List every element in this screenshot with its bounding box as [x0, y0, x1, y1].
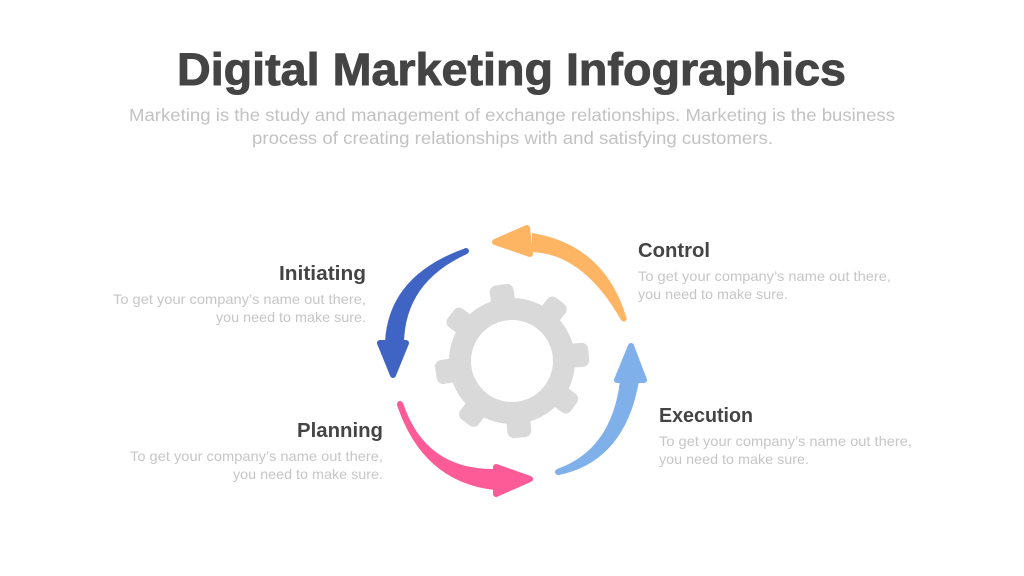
subtitle [129, 105, 895, 148]
text block: planning: you need to make sure. [233, 466, 383, 482]
title: Digital Marketing Infographics [177, 44, 846, 95]
text block: initiating: To get your company’s name out there, [113, 291, 366, 307]
icon: gear [434, 283, 590, 439]
text block: initiating: you need to make sure. [216, 309, 366, 325]
text block: execution: you need to make sure. [659, 451, 809, 467]
text block: planning: Planning [297, 420, 383, 442]
text block: execution [659, 405, 912, 467]
text block: planning: To get your company’s name out there, [130, 448, 383, 464]
text block: initiating: Initiating [279, 263, 366, 285]
arrow: planning (pink) [397, 401, 530, 494]
arrow: execution (light blue) [555, 346, 644, 475]
text block: execution: To get your company’s name out there, [659, 433, 912, 449]
text block: control: To get your company’s name out there, [638, 268, 891, 284]
text block: execution: Execution [659, 405, 753, 427]
text block: planning [130, 420, 383, 482]
text block: control [638, 240, 891, 302]
arrow: control (orange) [495, 228, 627, 322]
subtitle: Marketing is the study and management of exchange relationships. Marketing is the business [129, 105, 895, 125]
arrow: initiating (blue) [380, 248, 469, 375]
text block: control: Control [638, 240, 710, 262]
text block: initiating [113, 263, 366, 325]
text block: control: you need to make sure. [638, 286, 788, 302]
subtitle: process of creating relationships with and satisfying customers. [252, 128, 773, 148]
